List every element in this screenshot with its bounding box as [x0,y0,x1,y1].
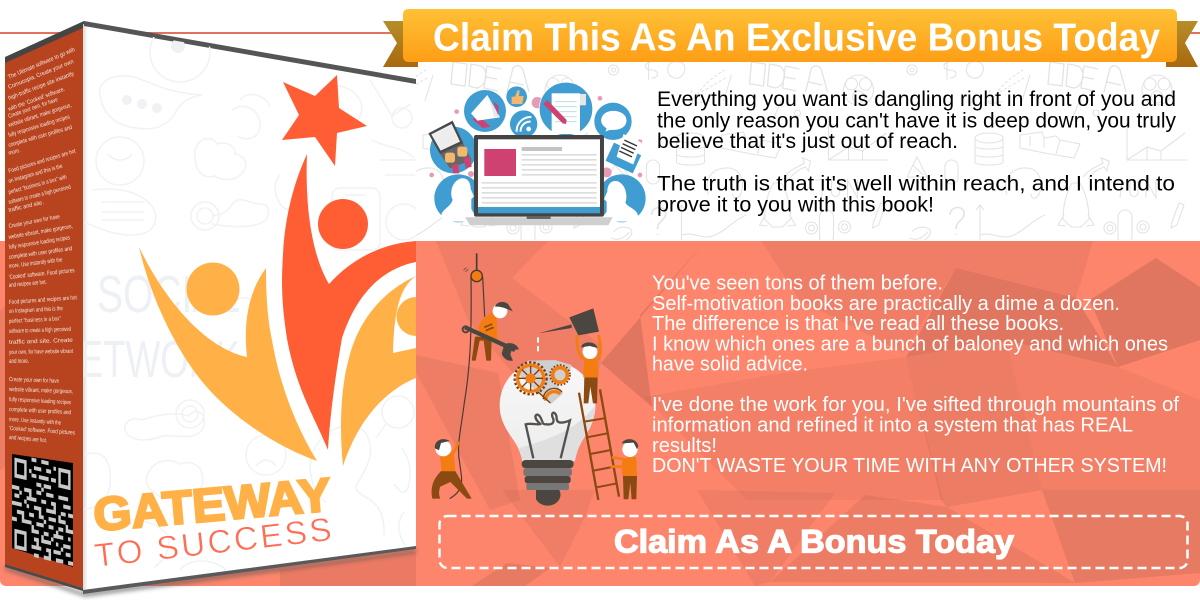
pink dots [429,96,642,177]
spine paragraph text: Food pictures and recipes are hot [9,295,77,306]
laptop [465,135,613,225]
megaphone circle [464,90,506,132]
text block: intro copy: the only reason you can't have it is deep down, you truly [657,110,1176,132]
spine paragraph text: complete with user profiles and [8,125,73,149]
spine paragraph text: website vibrant, make gorgeous, [7,103,73,129]
spine paragraph text: complete with user profiles and [8,246,73,261]
spine paragraph text: website vibrant, make gorgeous, [8,224,74,241]
logo wordmark: TO SUCCESS: TO SUCCESS [93,510,333,574]
bulb [500,360,596,506]
text block: main copy: The difference is that I've read all these books. [652,313,1064,335]
ladder [579,389,619,500]
top rule [0,32,1200,34]
person left circle [434,174,482,222]
text block: intro copy: The truth is that it's well within reach, and I intend to [657,172,1175,196]
text block: intro copy: Everything you want is dangling right in front of you and [657,88,1176,111]
logo: star [282,75,367,166]
worker at ladder base [610,439,638,499]
spine paragraph text: your own, for have website vibrant [9,349,73,356]
text block: main copy: have solid advice. [652,354,808,376]
box front face [52,21,422,594]
spine paragraph text: with the 'Cooked' software. [7,87,66,113]
text block: intro copy: prove it to you with this book! [657,194,934,216]
box ground shadow [5,549,416,597]
text block: main copy: DON'T WASTE YOUR TIME WITH ANY OTHER SYSTEM! [652,455,1167,477]
text block: main copy: I know which ones are a bunch of baloney and which ones [652,334,1168,356]
worker with wrench [463,302,519,361]
icon: workers repairing light bulb [432,253,638,506]
text block: intro copy [657,88,1176,216]
document circle [539,82,593,136]
logo: left figure [139,247,317,461]
call to action button [440,516,1188,568]
ribbon left tail [383,21,418,67]
spine paragraph text: Cornucopia. Create your own [8,59,75,91]
QR code [12,454,73,567]
logo: right figure [341,276,416,466]
faint doodles on box [84,22,422,570]
ribbon right tail [1166,21,1198,67]
text block: main copy: information and refined it into a system that has REAL [652,415,1133,437]
laptop hands circle [428,121,477,173]
envelope [606,132,646,173]
spine paragraph text: perfect "business in a box" with [8,175,67,196]
gears [515,362,570,403]
text block: main copy: You've seen tons of them before. [652,272,943,294]
spine paragraph text: software to create a high perceived [9,327,71,335]
faint title on box: NETWORK [52,331,240,389]
spine paragraph text: high-traffic recipe site instantly [8,71,75,102]
panel: salmon low-poly background [0,241,1200,586]
spine paragraph text: on Instagram and this is the [8,164,64,185]
logo: centre figure [282,154,416,450]
spine paragraph text: software to create a high perceived [8,185,72,206]
spine paragraph text: Create your own for have [9,377,60,385]
spine paragraph text: 'Cooked' software. Food pictures [9,268,75,281]
oil can [537,308,599,351]
spine paragraph text: 'Cooked' software. Food pictures [9,426,75,437]
spine paragraph text [7,47,77,444]
product box [5,21,422,597]
text block: intro copy: believe that it's just out of reach. [657,130,958,153]
worker on ladder [577,335,600,403]
person right circle [598,174,646,222]
faint title on box: SOCIAL [97,266,240,324]
spine paragraph text: fully responsive loading recipes [8,114,71,139]
text block: main copy [652,272,1179,477]
spine paragraph text: traffic and site. [8,200,45,214]
spine paragraph text: website vibrant, make gorgeous, [8,387,73,395]
panel: white doodle panel [416,34,1200,240]
spine paragraph text: on Instagram and this is the [9,306,64,315]
spine paragraph text: perfect "business in a box" [9,316,61,325]
spine paragraph text: Food pictures and recipes are hot [8,149,77,175]
spine paragraph text: and recipes are hot. [9,280,47,289]
text block: main copy: results! [652,435,717,457]
logo wordmark: GATEWAY: GATEWAY [91,467,333,541]
spine paragraph text: traffic and site. Create [9,338,74,346]
text block: main copy: Self-motivation books are practically a dime a dozen. [652,293,1120,315]
box spine [5,21,85,591]
faint title on box [84,276,239,378]
worker pulling rope [432,439,472,499]
spine paragraph text: The Ultimate software to go with [7,47,76,81]
spine paragraph text: more. [8,148,21,157]
spine paragraph text: Create your own, for have [8,97,59,120]
chat bubble circle [594,103,632,140]
pulley and rope [450,253,485,499]
button label: Claim As A Bonus Today [614,524,1014,560]
text block: main copy: I've done the work for you, I've sifted through mountains of [652,394,1179,416]
spine paragraph text: Create your own for have [8,214,61,230]
filament [526,413,570,458]
low-poly shards [0,241,1200,586]
spine paragraph text: fully responsive loading recipes [9,397,71,406]
wifi circle [510,110,537,138]
spine paragraph text: fully responsive loading recipes [8,235,71,251]
thumbs up circle [506,86,527,107]
ribbon title: Claim This As An Exclusive Bonus Today [433,16,1160,60]
ribbon banner [383,9,1198,67]
icon: social network laptop [428,82,646,225]
bulb base [522,460,574,468]
spine paragraph text: and recipes are hot. [9,435,47,444]
spine paragraph text: complete with user profiles and [9,407,71,416]
spine paragraph text: more. Use instantly with the [9,257,63,270]
spine paragraph text: more. Use instantly with the [9,417,62,427]
spine paragraph text: and more. [9,359,29,365]
